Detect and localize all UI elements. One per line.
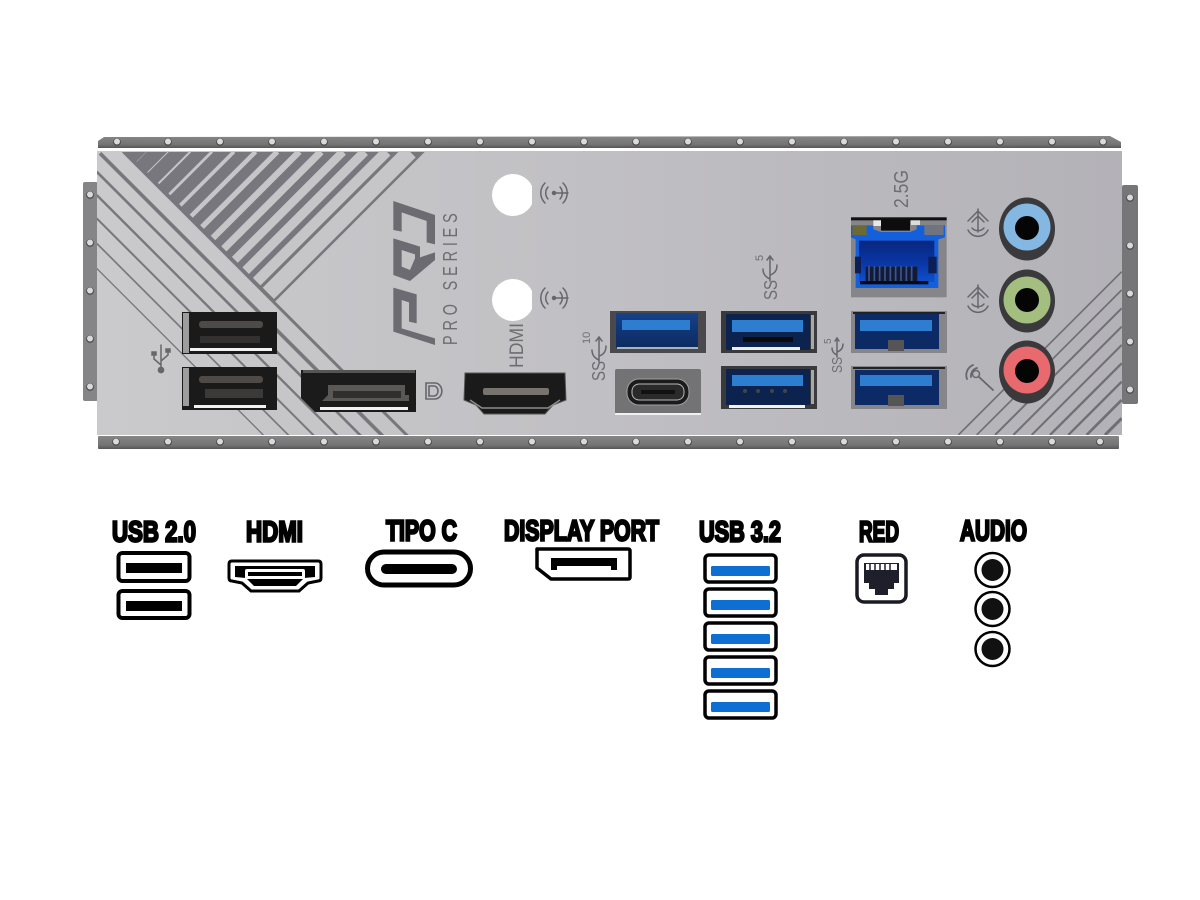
- icon: RJ45 port: [857, 555, 906, 602]
- legend: HDMI: [229, 516, 321, 591]
- heading: RED: RED: [859, 516, 899, 548]
- legend: USB 3.2: [699, 516, 781, 718]
- heading: TIPO C: TIPO C: [386, 516, 457, 548]
- diagonal stripe pattern right: [958, 272, 1122, 435]
- icon: DisplayPort connector: [537, 549, 630, 579]
- brand text: PRO SERIES: [439, 213, 462, 345]
- heading: USB 2.0: USB 2.0: [112, 516, 196, 548]
- port: HDMI: [464, 373, 566, 414]
- heading: DISPLAY PORT: DISPLAY PORT: [504, 516, 659, 548]
- USB 5G label lower: SS: [829, 357, 846, 373]
- port: audio jack green: [999, 270, 1055, 332]
- legend: Tipo C: [368, 516, 470, 585]
- icon: USB symbol: [152, 345, 170, 373]
- heading: HDMI: HDMI: [246, 516, 303, 548]
- 2.5G label: 2.5G: [891, 170, 913, 208]
- panel: motherboard rear I/O shield: [83, 136, 1138, 449]
- port: USB 3.2 right lower: [721, 366, 817, 409]
- legend: USB 2.0: [112, 516, 196, 618]
- USB 5G label lower: 5: [823, 338, 834, 344]
- icon: audio jacks: [976, 553, 1010, 666]
- icon: wifi antenna lower: [541, 288, 568, 308]
- port: USB 2.0 top: [182, 312, 277, 354]
- infographic canvas: [83, 136, 1138, 720]
- legend: Audio: [960, 516, 1027, 666]
- port: USB-C: [615, 369, 701, 415]
- port: USB 3.2 10G: [610, 311, 706, 353]
- port: USB 3.2 right upper: [721, 311, 817, 353]
- USB 5G label upper: SS: [761, 280, 781, 300]
- icon: USB-C port: [368, 552, 470, 585]
- USB 5G label upper: [754, 255, 781, 300]
- legend: DisplayPort: [504, 516, 659, 579]
- USB 10G label: SS: [589, 361, 609, 381]
- metal plate: [97, 151, 1122, 435]
- heading: AUDIO: AUDIO: [960, 516, 1027, 548]
- USB 10G label: 10: [581, 332, 593, 344]
- icon: USB 2.0 ports: [118, 553, 190, 618]
- right side tab: [1122, 185, 1138, 404]
- bottom rail with rivets: [98, 436, 1119, 449]
- top rail with rivets: [98, 136, 1121, 148]
- port: audio jack blue: [999, 198, 1055, 260]
- icon: wifi antenna upper: [541, 183, 568, 203]
- USB 5G label lower: [823, 338, 846, 373]
- icon: DisplayPort logo: [426, 383, 442, 399]
- icon: USB 3.2 ports: [705, 555, 776, 718]
- legend: Red: [857, 516, 906, 602]
- mounting holes: [492, 174, 534, 321]
- HDMI label: HDMI: [507, 323, 528, 368]
- left side tab: [83, 182, 98, 401]
- port: USB 2.0 bottom: [182, 367, 277, 410]
- icon: HDMI port: [229, 561, 321, 591]
- diagonal stripe pattern left: [97, 152, 424, 435]
- icon: line in: [968, 209, 988, 236]
- USB 10G label: [581, 332, 609, 381]
- port: DisplayPort: [301, 370, 416, 412]
- port: USB 3.2 RJ45 lower: [851, 366, 947, 409]
- heading: USB 3.2: USB 3.2: [699, 516, 781, 548]
- USB 5G label upper: 5: [754, 255, 766, 261]
- port: audio jack red: [999, 340, 1055, 404]
- icon: line out: [968, 285, 988, 312]
- port: USB 3.2 RJ45 upper: [851, 311, 947, 353]
- icon: microphone: [966, 365, 993, 390]
- logo: PRO mark: [393, 201, 435, 345]
- port: RJ45 network: [851, 217, 947, 297]
